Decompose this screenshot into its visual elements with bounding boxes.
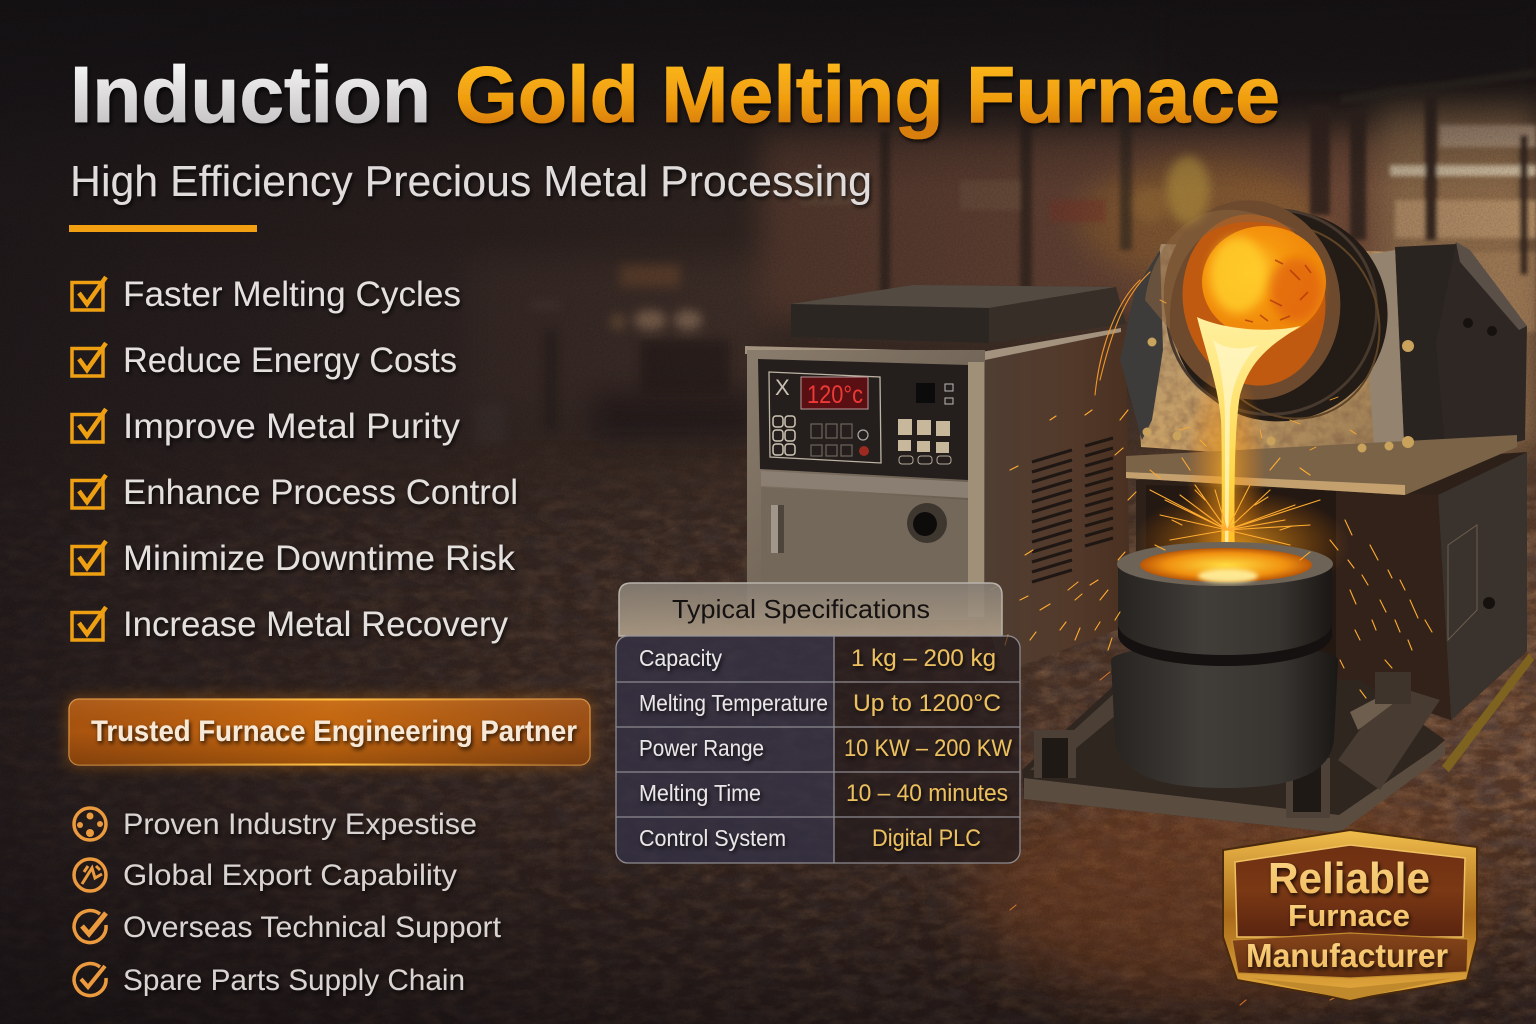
sparks [990, 272, 1432, 1005]
subtitle: High Efficiency Precious Metal Processing [70, 157, 872, 206]
table header [619, 583, 1002, 636]
row: melting time [639, 780, 1008, 807]
badge: reliable furnace manufacturer [1223, 830, 1477, 1000]
row: power range: 10 KW – 200 KW [844, 735, 1012, 762]
specifications table [616, 583, 1020, 863]
row: melting time: 10 – 40 minutes [846, 780, 1008, 807]
title: Induction [70, 50, 431, 139]
row: melting temperature: Melting Temperature [639, 690, 828, 716]
row: capacity: Capacity [639, 645, 722, 671]
power cabinet: 120°c [807, 381, 863, 409]
title: Gold Melting Furnace [455, 50, 1280, 139]
badge: reliable furnace manufacturer: Manufacturer [1246, 937, 1448, 974]
power cabinet [745, 285, 1130, 672]
vents [1032, 438, 1113, 582]
row: melting temperature: Up to 1200°C [853, 690, 1001, 717]
furnace lower body [1130, 452, 1534, 772]
title [70, 50, 1280, 139]
capability: support: Overseas Technical Support [123, 911, 502, 944]
banner: trusted partner [66, 696, 593, 768]
row: capacity [639, 645, 996, 672]
benefit 1: Faster Melting Cycles [123, 275, 461, 314]
benefit 5: Minimize Downtime Risk [123, 539, 516, 578]
row: control system: Control System [639, 825, 786, 851]
tilting furnace housing [1120, 240, 1527, 609]
badge: reliable furnace manufacturer: Furnace [1288, 898, 1410, 933]
benefits checklist [72, 275, 518, 644]
receiving crucible [1111, 542, 1338, 788]
benefit 3: Improve Metal Purity [123, 407, 461, 446]
benefit 4: Enhance Process Control [123, 473, 518, 512]
capability: spare parts: Spare Parts Supply Chain [123, 964, 465, 997]
benefit 2: Reduce Energy Costs [123, 341, 457, 380]
furnace base frame [1022, 672, 1445, 833]
table header: Typical Specifications [672, 594, 930, 624]
row: power range: Power Range [639, 735, 764, 761]
row: power range [639, 735, 1012, 762]
gold dust plume [1132, 156, 1210, 224]
row: control system: Digital PLC [872, 825, 981, 852]
door handle and knob [771, 505, 778, 553]
row: melting temperature [639, 690, 1001, 717]
capabilities list [74, 808, 502, 997]
capability: expertise: Proven Industry Expestise [123, 808, 477, 841]
capability: export: Global Export Capability [123, 859, 457, 892]
row: control system [639, 825, 981, 852]
badge: reliable furnace manufacturer: Reliable [1268, 854, 1430, 903]
accent underline [69, 225, 257, 232]
table body [616, 636, 1020, 863]
power cabinet: X [775, 375, 790, 400]
control panel [769, 372, 881, 463]
pouring crucible [1136, 178, 1419, 454]
row: capacity: 1 kg – 200 kg [851, 645, 996, 672]
illustration: induction furnace scene [745, 156, 1534, 1005]
banner: trusted partner: Trusted Furnace Engineering Partner [91, 715, 577, 748]
molten gold stream [1186, 317, 1301, 580]
row: melting time: Melting Time [639, 780, 761, 806]
benefit 6: Increase Metal Recovery [123, 605, 508, 644]
